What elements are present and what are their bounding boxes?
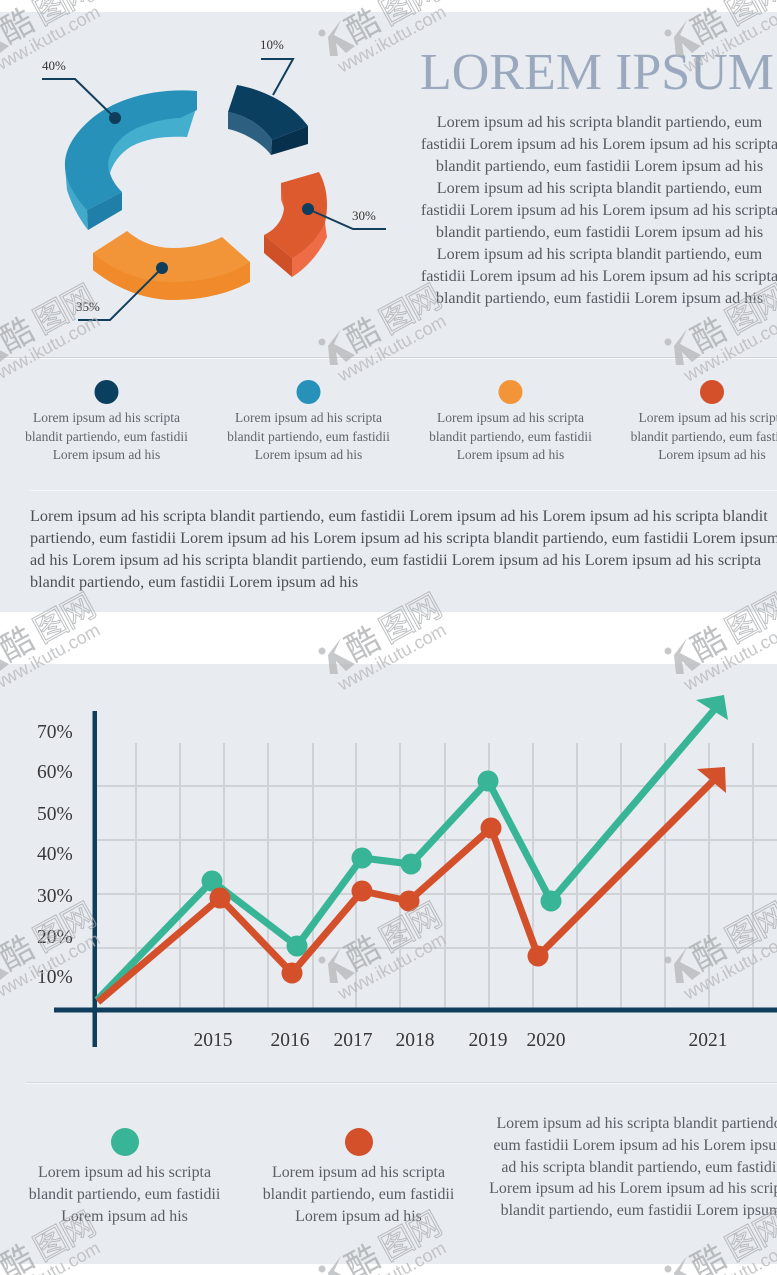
watermarks: 网 (397, 270, 449, 328)
x axis labels: 2017 (334, 1030, 373, 1051)
legend item: blue: Lorem ipsum ad his (255, 447, 362, 462)
watermarks: 图 (24, 1212, 76, 1270)
legend item: green series: Lorem ipsum ad his scripta (38, 1164, 211, 1181)
legend item: green series: blandit partiendo, eum fastidii (29, 1186, 221, 1203)
legend item: red series (263, 1128, 455, 1225)
y axis labels: 30% (37, 886, 73, 907)
watermarks: 图 (716, 285, 768, 343)
text block: intro paragraph: fastidii Lorem ipsum ad his Lorem ipsum ad his scripta (421, 202, 777, 219)
legend item: orange (429, 380, 592, 462)
series: red (98, 767, 726, 1002)
legend item: blue (227, 380, 390, 462)
watermarks: 图 (24, 285, 76, 343)
callout: 10%: 10% (260, 37, 284, 52)
watermarks: www.ikutu.com (333, 311, 449, 386)
watermarks: 网 (397, 888, 449, 946)
legend item: red (631, 380, 777, 462)
text block: wide paragraph: partiendo, eum fastidii Lorem ipsum ad his Lorem ipsum ad his scripta blandit partiendo, eum fastidii Lorem ipsum (30, 529, 777, 547)
x axis labels: 2020 (526, 1030, 566, 1051)
panel: chart (0, 664, 777, 1264)
text block: wide paragraph: Lorem ipsum ad his scripta blandit partiendo, eum fastidii Lorem ipsum ad his Lorem ipsum ad his scripta blandit (30, 507, 768, 525)
watermarks: 网 (51, 1197, 103, 1255)
watermarks: 图 (370, 594, 422, 652)
x axis labels: 2019 (468, 1030, 508, 1051)
watermarks: 图 (24, 903, 76, 961)
y axis labels: 70% (37, 722, 73, 743)
watermarks: 酷 (335, 304, 387, 362)
legend item: orange: Lorem ipsum ad his (457, 447, 564, 462)
legend item: blue: blandit partiendo, eum fastidii (227, 429, 390, 444)
legend item: orange: blandit partiendo, eum fastidii (429, 429, 592, 444)
text block: intro paragraph: blandit partiendo, eum fastidii Lorem ipsum ad his (436, 224, 763, 241)
callout: 30% (302, 203, 386, 229)
ring segment: blue 40% (65, 90, 197, 230)
text block: intro paragraph: Lorem ipsum ad his scripta blandit partiendo, eum (437, 246, 763, 263)
legend item: green series (29, 1128, 221, 1225)
text block: intro paragraph: blandit partiendo, eum fastidii Lorem ipsum ad his (436, 158, 763, 175)
watermarks: www.ikutu.com (333, 620, 449, 695)
text block: wide paragraph (30, 507, 777, 591)
x axis labels (194, 1030, 728, 1051)
title: LOREM IPSUM (420, 44, 774, 101)
legend item: red series: Lorem ipsum ad his (295, 1208, 422, 1225)
legend item: red series: blandit partiendo, eum fastidii (263, 1186, 455, 1203)
watermarks: 网 (51, 888, 103, 946)
text block: intro paragraph: Lorem ipsum ad his scripta blandit partiendo, eum (437, 114, 763, 131)
x axis labels: 2021 (688, 1030, 728, 1051)
watermarks: 酷 (335, 613, 387, 671)
legend item: navy: Lorem ipsum ad his scripta (33, 410, 180, 425)
text block: bottom right paragraph (489, 1115, 777, 1219)
x axis labels: 2016 (270, 1030, 310, 1051)
watermarks: 网 (51, 270, 103, 328)
legend item: green series: Lorem ipsum ad his (61, 1208, 188, 1225)
text block: intro paragraph: Lorem ipsum ad his scripta blandit partiendo, eum (437, 180, 763, 197)
text block: bottom right paragraph: Lorem ipsum ad his scripta blandit partiendo, (496, 1115, 777, 1132)
watermarks: 图 (370, 285, 422, 343)
callout: 30%: 30% (352, 208, 376, 223)
y axis labels: 40% (37, 844, 73, 865)
watermarks: 图 (24, 594, 76, 652)
y axis labels (37, 722, 73, 988)
watermarks: 网 (51, 579, 103, 637)
segmented ring chart (42, 37, 386, 320)
ring segment: red 30% (264, 172, 327, 277)
text block: bottom right paragraph: blandit partiendo, eum fastidii Lorem ipsum (501, 1202, 777, 1219)
watermarks: 网 (397, 1197, 449, 1255)
callout: 10% (260, 37, 293, 95)
y axis labels: 50% (37, 804, 73, 825)
legend item: navy: blandit partiendo, eum fastidii (25, 429, 188, 444)
watermarks: 图 (716, 903, 768, 961)
text block: intro paragraph (421, 114, 777, 307)
text block: intro paragraph: blandit partiendo, eum fastidii Lorem ipsum ad his (436, 290, 763, 307)
chart grid (96, 743, 777, 1008)
callout: 35%: 35% (76, 299, 100, 314)
legend item: navy (25, 380, 188, 462)
callout: 40% (42, 58, 121, 124)
y axis labels: 60% (37, 762, 73, 783)
watermarks: 酷 (681, 922, 733, 980)
legend item: red: Lorem ipsum ad his (658, 447, 766, 462)
watermarks: www.ikutu.com (333, 929, 449, 1004)
text block: intro paragraph: fastidii Lorem ipsum ad his Lorem ipsum ad his scripta (421, 268, 777, 285)
watermarks: 酷 (681, 304, 733, 362)
legend item: orange: Lorem ipsum ad his scripta (437, 410, 584, 425)
callout: 40%: 40% (42, 58, 66, 73)
y axis labels: 20% (37, 927, 73, 948)
watermarks: 图 (370, 1212, 422, 1270)
watermarks: 网 (397, 579, 449, 637)
text block: bottom right paragraph: ad his scripta blandit partiendo, eum fastidii (501, 1159, 777, 1176)
x axis labels: 2015 (194, 1030, 232, 1051)
legend item: navy: Lorem ipsum ad his (53, 447, 160, 462)
watermarks: 酷 (681, 613, 733, 671)
text block: intro paragraph: fastidii Lorem ipsum ad his Lorem ipsum ad his scripta (421, 136, 777, 153)
x axis labels: 2018 (396, 1030, 434, 1051)
watermarks: 酷 (335, 922, 387, 980)
panel: top (0, 12, 777, 612)
legend item: blue: Lorem ipsum ad his scripta (235, 410, 382, 425)
text block: wide paragraph: ad his Lorem ipsum ad his scripta blandit partiendo, eum fastidii Lorem ipsum ad his Lorem ipsum ad his scripta (30, 551, 761, 569)
series: green (97, 695, 728, 1000)
line chart (37, 695, 777, 1051)
watermarks: www.ikutu.com (333, 2, 449, 77)
text block: wide paragraph: blandit partiendo, eum fastidii Lorem ipsum ad his (30, 573, 358, 591)
legend item: red series: Lorem ipsum ad his scripta (272, 1164, 445, 1181)
y axis labels: 10% (37, 967, 73, 988)
watermarks: 图 (716, 594, 768, 652)
ring segment: orange 35% (93, 231, 250, 300)
watermarks: 图 (370, 903, 422, 961)
callout: 35% (76, 262, 168, 320)
chart axes (54, 711, 777, 1047)
ring segment: navy 10% (228, 85, 308, 155)
watermarks: 图 (716, 1212, 768, 1270)
